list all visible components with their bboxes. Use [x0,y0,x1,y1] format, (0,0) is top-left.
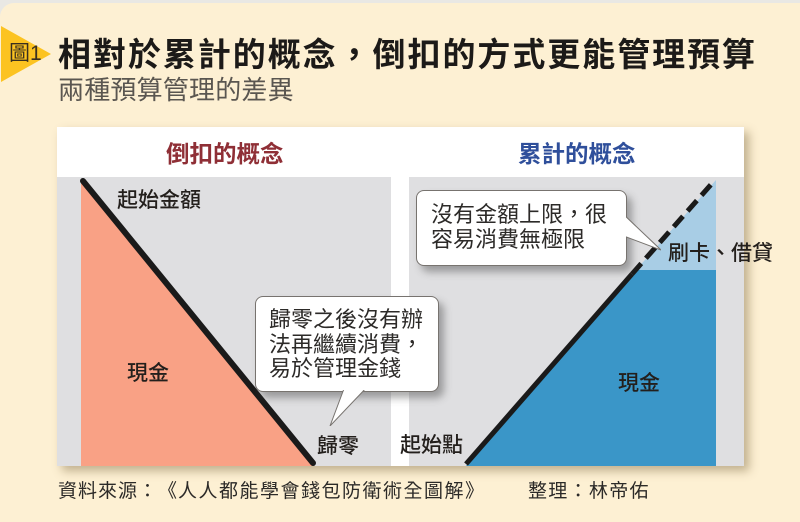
callout: zero balance: 歸零之後沒有辦 [269,307,423,332]
callout: no limit: 容易消費無極限 [431,227,585,252]
icon: figure marker [1,26,51,82]
panel: comparison [57,127,744,466]
source note: 資料來源： [58,481,158,502]
title: 相對於累計的概念，倒扣的方式更能管理預算 [58,36,757,73]
callout: zero balance: 法再繼續消費， [269,332,423,356]
icon: figure marker: 圖1 [9,42,42,65]
callout: no limit: 沒有金額上限，很 [431,202,607,227]
label: starting amount: 起始金額 [117,189,201,212]
source note: 《 [158,481,178,502]
heading: deduction: 倒扣的概念 [166,141,284,167]
label: credit card and loans: 刷卡、借貸 [668,242,773,265]
callout: zero balance [255,296,449,426]
subtitle: 兩種預算管理的差異 [58,75,294,105]
heading: cumulative: 累計的概念 [518,141,636,167]
callout: no limit [416,190,661,277]
callout: zero balance: 易於管理金錢 [269,356,401,381]
source note: 》 [465,481,485,502]
editor credit: 整理：林帝佑 [528,481,650,502]
label: cash right: 現金 [618,372,660,395]
source note [58,480,485,502]
label: zero: 歸零 [317,435,359,458]
source note: 人人都能學會錢包防衛術全圖解 [178,481,465,502]
label: starting point: 起始點 [400,434,463,457]
label: cash left: 現金 [127,362,169,385]
